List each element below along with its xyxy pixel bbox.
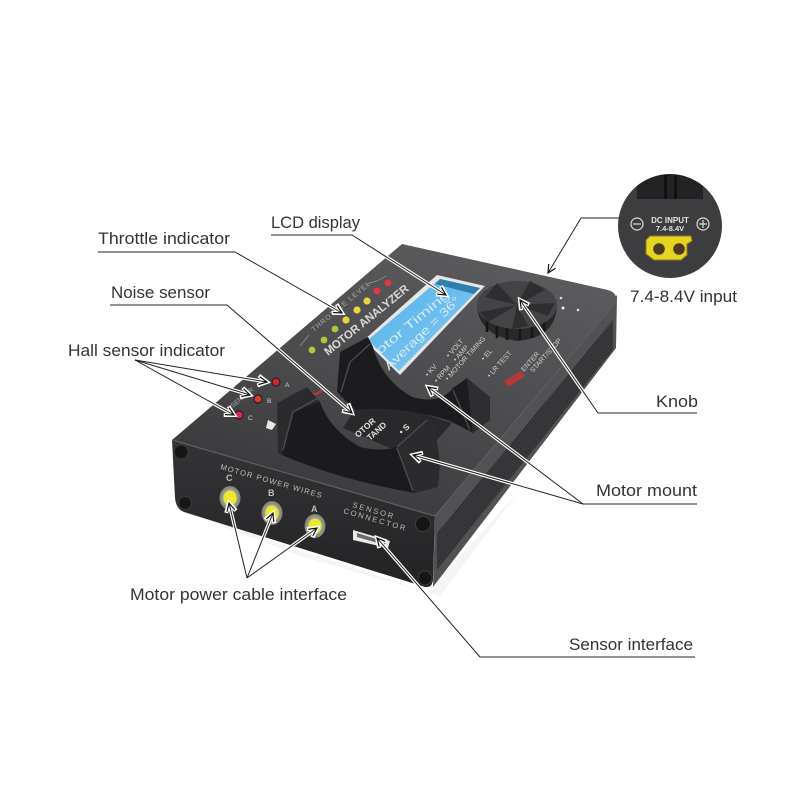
callout: hall sensor indicator [68,341,267,415]
callout: hall sensor indicator: Hall sensor indicator [68,341,225,360]
lcd display: Average = 36° [381,293,463,373]
menu text: • KV [424,363,439,378]
callout: noise sensor: Noise sensor [111,283,210,302]
knob [477,281,579,341]
throttle bracket [300,276,386,346]
front panel labels [219,462,407,533]
red logo arc [308,390,322,394]
inset: DC input close-up: 7.4-8.4V [656,224,684,233]
menu text: START/STOP [529,337,564,374]
stand text [353,416,412,442]
stand text: • S [397,421,412,436]
corner screws [174,445,432,585]
hall sensor LEDs: SENSOR [230,386,256,410]
menu text: • AMP [452,344,471,363]
front mount walls [277,387,440,493]
red start button [504,371,525,387]
callout: knob [520,300,698,413]
menu text: • RPM [433,365,452,384]
menu text: ENTER [520,351,541,373]
label: input voltage: 7.4-8.4V input [630,287,737,306]
front panel labels: MOTOR POWER WIRES [219,462,323,500]
callout: motor mount [413,387,697,504]
front panel labels: SENSOR [351,500,395,521]
callout: noise sensor [110,283,352,413]
right side face [433,295,617,587]
knob direction marks [560,297,562,299]
callout: motor mount: Motor mount [596,481,697,500]
logo mark [266,420,276,430]
hall sensor LEDs: A [285,382,290,389]
callout: LCD display: LCD display [271,213,360,232]
hall sensor LEDs [230,378,290,422]
hall sensor LEDs: C [248,415,253,422]
power jacks [220,486,326,538]
menu text: • EL [480,348,494,362]
menu text [424,336,564,384]
top face [172,244,616,517]
front panel labels: C [226,473,233,483]
rear motor mount [337,337,473,433]
minus symbol [631,218,643,230]
lcd display [364,275,485,375]
front top edge highlight [172,302,616,516]
motor analyzer title: MOTOR ANALYZER [322,282,412,358]
device: motor analyzer [172,244,617,596]
right side ribbed panel [437,320,613,570]
device shadow [180,490,520,596]
front panel labels: CONNECTOR [342,506,407,533]
callout: motor power cable interface [130,503,347,604]
menu text: • MOTOR TIMING [444,336,487,382]
throttle legend [300,276,391,353]
inset: DC input close-up [618,174,722,278]
callout: LCD display [271,213,446,295]
throttle level text: THROTTLE LEVEL [311,280,372,334]
front panel labels: A [311,504,318,514]
callout: sensor interface: Sensor interface [569,635,693,654]
callout: motor power cable interface: Motor power cable interface [130,585,347,604]
stand text: TAND [365,420,388,442]
front mount clip [283,398,427,491]
rear mount clip [341,344,470,430]
callout: knob: Knob [656,392,698,411]
callout: throttle indicator: Throttle indicator [98,229,230,248]
menu text: • LR TEST [486,350,514,379]
front motor mount [282,402,415,493]
hall sensor LEDs: B [267,398,271,405]
throttle LEDs [309,280,391,353]
front face [172,440,435,587]
callout: sensor interface [377,538,695,657]
callout: DC input [548,218,620,273]
sensor connector [353,530,390,548]
callout: throttle indicator [98,229,342,313]
front panel labels: B [268,488,275,498]
lcd text: otor Timing [373,287,452,357]
floor between mounts [343,408,452,450]
menu text: • VOLT [445,338,466,359]
rear mount right wall [467,378,490,433]
stand text: OTOR [353,416,377,439]
plus symbol [697,218,709,230]
DC input text: DC INPUT [651,216,689,225]
XT30 connector [646,236,692,260]
